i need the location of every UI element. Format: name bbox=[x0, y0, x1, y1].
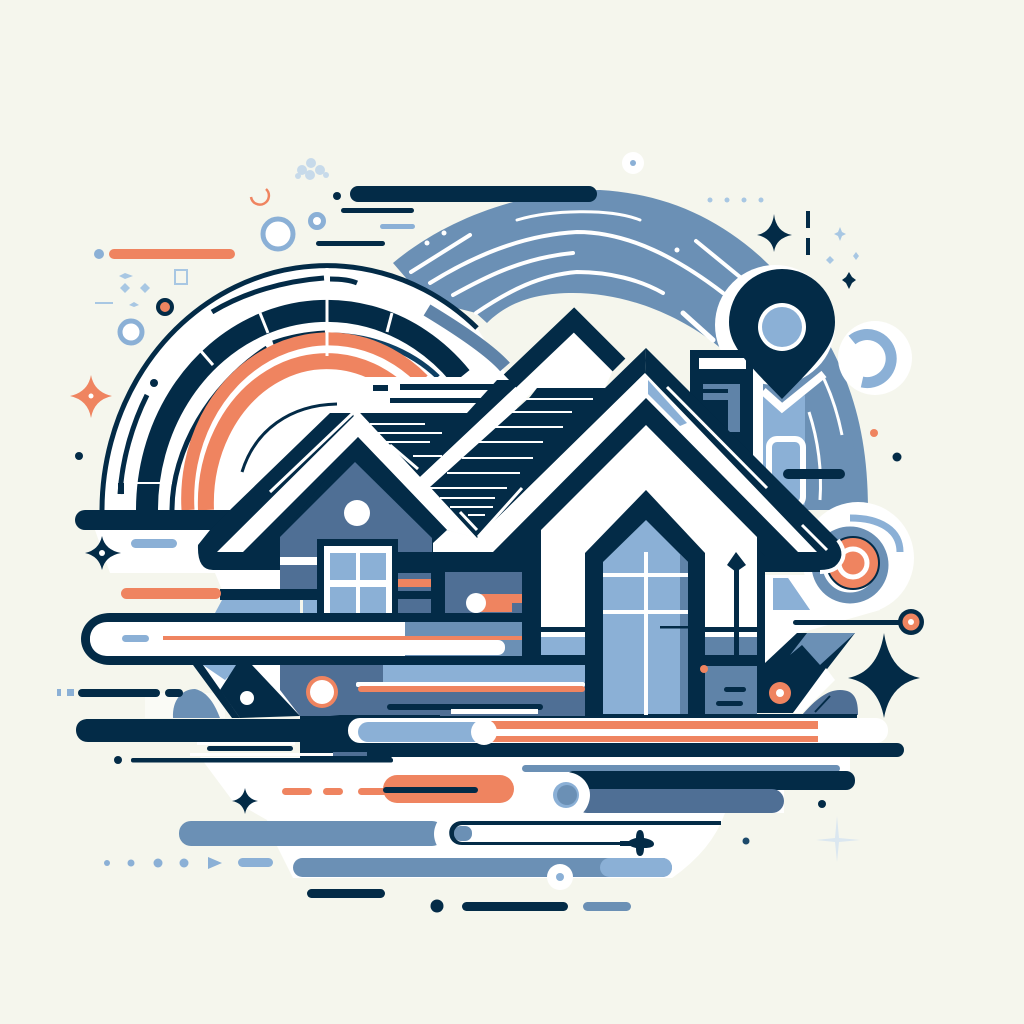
roof white band bbox=[217, 413, 477, 552]
lower left angular shape bbox=[173, 665, 300, 718]
window bbox=[317, 539, 398, 614]
lamp bbox=[727, 552, 746, 655]
blue bars with capsule bbox=[179, 818, 721, 890]
icon: navy stars top right bbox=[757, 211, 856, 289]
roof outer bbox=[198, 413, 450, 570]
coral dash row bbox=[282, 775, 514, 803]
chimney bbox=[690, 350, 753, 480]
left side dashes bbox=[57, 689, 183, 697]
decorative rings top left bbox=[120, 189, 324, 343]
faint blue sparkles left bbox=[95, 270, 187, 307]
icon: coral star bbox=[70, 375, 112, 418]
faint blue dots top right bbox=[708, 198, 859, 264]
icon: faint star bottom right bbox=[816, 816, 860, 862]
big front house bbox=[433, 348, 844, 666]
interior wall bbox=[522, 425, 765, 665]
location pin bbox=[729, 269, 835, 399]
big pill outline bbox=[81, 613, 590, 665]
icon: left star with blue pill bbox=[85, 536, 177, 570]
white and coral lane bbox=[348, 718, 888, 745]
striped back roof bbox=[360, 320, 646, 538]
porch box bbox=[700, 665, 757, 714]
white background shapes bbox=[95, 530, 850, 878]
panel: left concentric arcs bbox=[102, 266, 517, 512]
small dots bbox=[75, 429, 902, 844]
front roof white band bbox=[433, 373, 817, 552]
icon: target rings bbox=[773, 502, 914, 614]
base bar left bbox=[75, 510, 250, 530]
front roof outer bbox=[492, 348, 844, 572]
icon: top white dot bbox=[622, 152, 644, 174]
pin halo bbox=[715, 265, 835, 385]
icon: blue C ring bbox=[838, 321, 912, 395]
side block bbox=[431, 552, 526, 614]
lower bars right bbox=[520, 765, 855, 820]
connector dot bbox=[793, 609, 924, 635]
right lower angular shape bbox=[300, 575, 880, 720]
faint dotted pattern top bbox=[295, 158, 329, 180]
door bbox=[585, 490, 705, 716]
blue panel under pin bbox=[753, 374, 868, 510]
navy main bar bbox=[76, 715, 904, 764]
small left house bbox=[121, 413, 526, 614]
icon: star bbox=[232, 788, 258, 814]
bottom dashes bbox=[307, 889, 631, 912]
top bars bbox=[316, 186, 597, 246]
icon: large star bbox=[848, 633, 920, 718]
lower slate band bbox=[280, 665, 585, 716]
blue sweeping arc bbox=[393, 190, 868, 510]
dotted trail bbox=[104, 857, 273, 869]
coral bar top left bbox=[94, 249, 235, 259]
